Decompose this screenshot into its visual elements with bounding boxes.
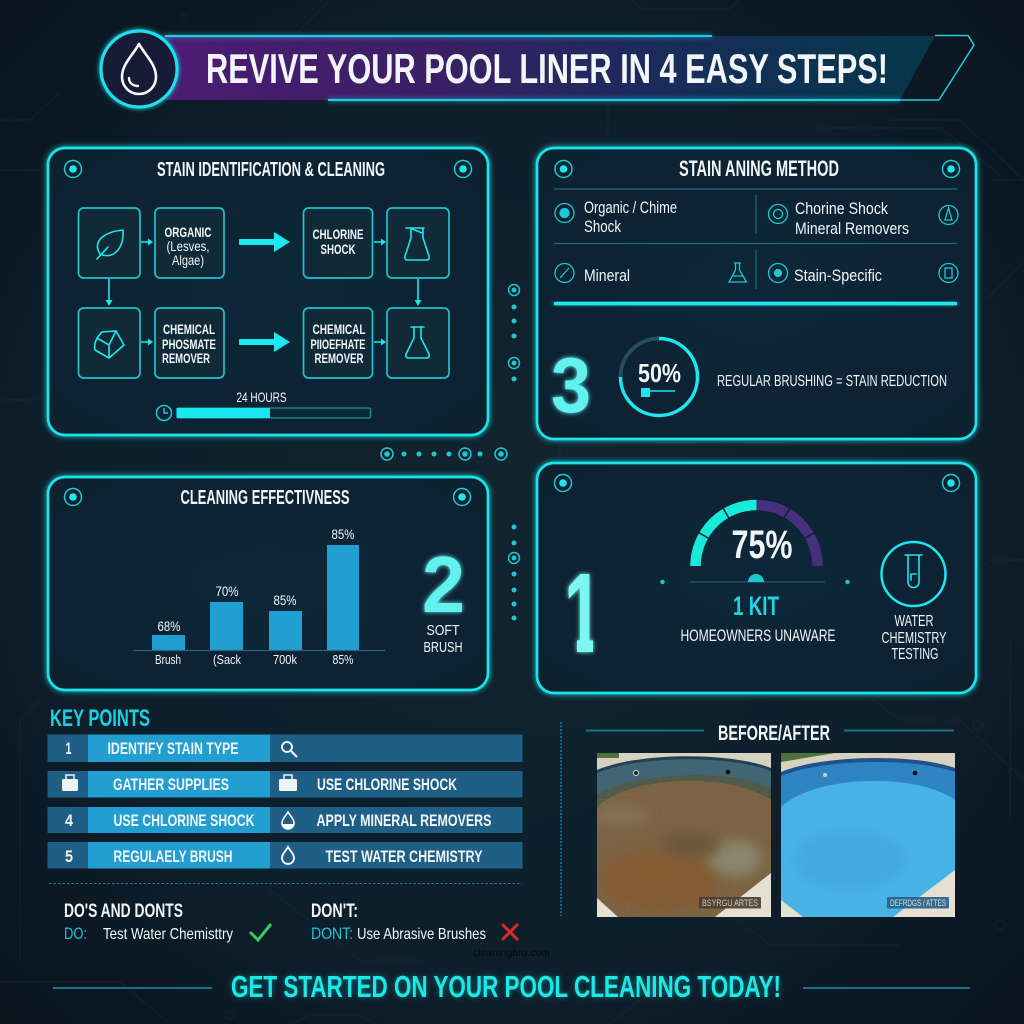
connector dots top	[381, 284, 520, 620]
bar chart: 68%	[158, 618, 180, 634]
row 2: GATHER SUPPLIES	[113, 775, 229, 794]
do's and don'ts: Use Abrasive Brushes	[357, 926, 486, 943]
do's and don'ts: DON'T:	[311, 901, 358, 922]
row 4: TEST WATER CHEMISTRY	[326, 847, 483, 866]
bar chart: (Sack	[213, 652, 241, 667]
key points	[48, 705, 522, 884]
method icons	[555, 204, 958, 282]
icon: spray flask	[405, 228, 429, 260]
gauge 75%	[660, 505, 850, 584]
bar chart: Brush	[155, 652, 181, 667]
ring chart 50%: 50%	[638, 358, 681, 388]
ring chart 50%	[620, 338, 698, 416]
heading: CLEANING EFFECTIVNESS	[180, 487, 350, 509]
title banner	[101, 31, 974, 107]
panel: cleaning effectiveness, step 2	[48, 477, 488, 690]
panel: stain cleaning method, step 3	[537, 148, 976, 439]
step labels: CHLORINE	[312, 226, 364, 242]
stat: HOMEOWNERS UNAWARE	[680, 626, 836, 645]
stat: 1 KIT	[733, 591, 779, 621]
step labels: ORGANIC	[164, 224, 212, 240]
row 1	[48, 734, 522, 762]
caption	[424, 622, 462, 656]
icon: flask	[406, 327, 429, 358]
icon: rock	[95, 331, 124, 358]
bar chart	[133, 526, 385, 667]
heading: BEFORE/AFTER	[718, 722, 830, 745]
photo: after	[781, 753, 955, 917]
step labels: SHOCK	[320, 241, 356, 257]
icon: check	[250, 924, 271, 940]
gauge 75%: 75%	[732, 523, 792, 567]
step labels: PHOSMATE	[162, 336, 216, 352]
photo: before	[592, 753, 771, 917]
method table: Mineral	[584, 266, 630, 285]
step number 3: 3	[551, 341, 591, 429]
step number 2: 2	[422, 540, 465, 629]
panel markers	[555, 160, 960, 178]
photo: after: DEFRDGS / ATTES	[890, 898, 946, 908]
bar chart: 70%	[216, 583, 238, 599]
row 4: 5	[65, 847, 73, 866]
panel markers	[554, 474, 960, 492]
method table: Organic / Chime	[584, 198, 677, 217]
step number 1: 1	[564, 550, 602, 676]
heading: STAIN ANING METHOD	[679, 156, 839, 181]
method table: Shock	[584, 217, 621, 236]
icon: water drop badge	[101, 31, 177, 107]
panel markers	[64, 488, 470, 506]
caption	[882, 613, 946, 663]
bar chart: 700k	[273, 652, 297, 667]
row 1: IDENTIFY STAIN TYPE	[108, 739, 238, 758]
heading: KEY POINTS	[50, 705, 150, 732]
do's and don'ts: DO:	[64, 924, 87, 943]
caption: BRUSH	[424, 639, 462, 656]
step labels: REMOVER	[162, 350, 210, 366]
caption: WATER	[894, 613, 934, 630]
caption: TESTING	[892, 646, 938, 663]
row 2: USE CHLORINE SHOCK	[317, 775, 458, 794]
heading: STAIN IDENTIFICATION & CLEANING	[157, 159, 385, 181]
arrows	[106, 232, 422, 352]
row 3	[48, 807, 522, 833]
before/after section	[561, 722, 955, 917]
row 4	[48, 842, 522, 868]
row 1: 1	[66, 739, 72, 758]
row 3: 4	[65, 811, 73, 830]
method table: Chorine Shock	[795, 199, 888, 218]
step labels: Algae)	[172, 252, 204, 268]
row 3: USE CHLORINE SHOCK	[114, 811, 255, 830]
flow boxes	[78, 208, 449, 378]
do's and don'ts	[64, 901, 550, 959]
bar chart: 85%	[274, 592, 296, 608]
step labels	[162, 224, 366, 366]
caption: SOFT	[426, 622, 460, 639]
step labels: CHEMICAL	[163, 321, 215, 337]
method table	[554, 189, 958, 305]
method table: Mineral Removers	[795, 219, 909, 238]
panel: stain identification and cleaning	[48, 148, 488, 435]
caption: CHEMISTRY	[882, 630, 946, 647]
step labels: (Lesves,	[166, 238, 210, 254]
icon: leaf	[97, 230, 123, 259]
footer call to action: GET STARTED ON YOUR POOL CLEANING TODAY!	[231, 969, 781, 1004]
row 3: APPLY MINERAL REMOVERS	[316, 811, 492, 830]
do's and don'ts: DONT:	[311, 924, 353, 943]
bar chart: 85%	[332, 526, 354, 542]
photo: before: BSYRGU ARTES	[702, 898, 758, 908]
timer progress bar: 24 HOURS	[236, 389, 286, 405]
row 4: REGULAELY BRUSH	[114, 847, 232, 866]
panel: homeowners unaware, step 1	[537, 463, 976, 693]
method table: Stain-Specific	[794, 266, 882, 285]
timer progress bar	[156, 389, 370, 420]
step labels: REMOVER	[314, 350, 364, 366]
icon: cross	[502, 924, 518, 940]
stat	[680, 591, 836, 645]
step labels: PIIOEFHATE	[310, 336, 366, 352]
do's and don'ts: Test Water Chemisttry	[103, 926, 233, 943]
do's and don'ts: DO'S AND DONTS	[64, 901, 183, 922]
watermark: cleaningbro.com	[473, 948, 550, 959]
panel markers	[64, 160, 472, 178]
bar chart: 85%	[332, 652, 354, 667]
step labels: CHEMICAL	[312, 321, 366, 337]
icon: test tube	[882, 542, 946, 606]
row 2	[48, 771, 522, 798]
